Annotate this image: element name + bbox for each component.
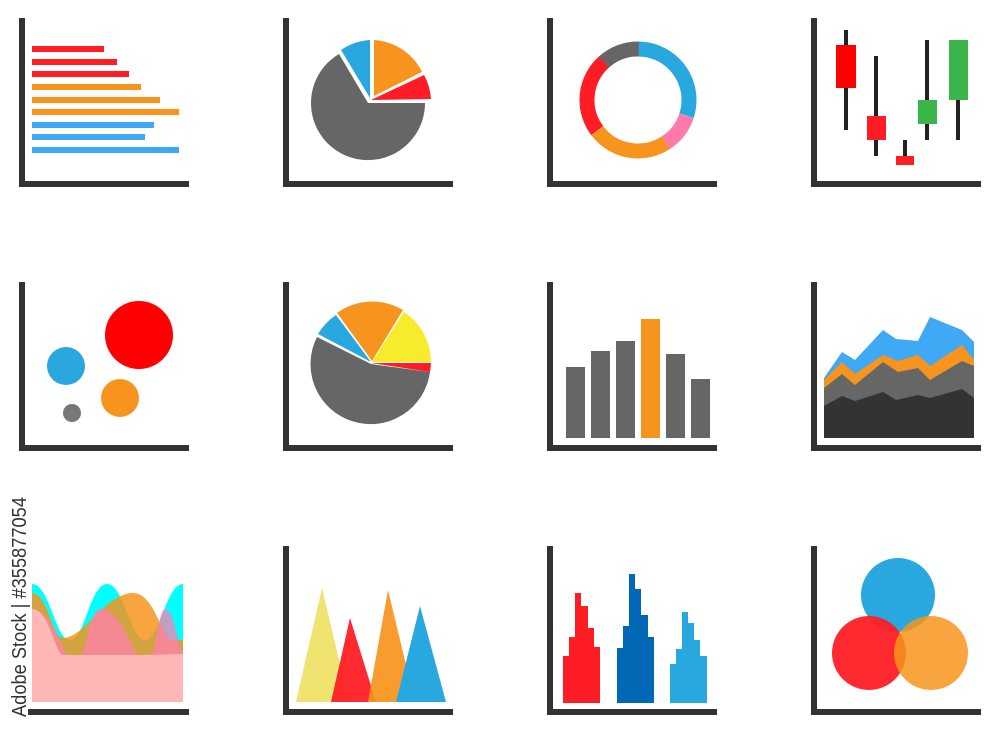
icon: pie chart xyxy=(286,282,453,448)
icon: histogram chart xyxy=(550,546,717,712)
icon: column chart xyxy=(550,282,717,448)
icon: candlestick chart xyxy=(814,18,981,184)
icon: horizontal bar chart xyxy=(22,18,189,184)
icon: wave area chart xyxy=(28,584,189,712)
icon: triangle chart xyxy=(286,546,453,712)
icon: venn diagram xyxy=(814,546,981,712)
icon: stacked area chart xyxy=(814,282,981,448)
icon: donut chart xyxy=(550,18,717,184)
icon: exploded pie chart xyxy=(286,18,453,184)
watermark text: vertical: Adobe Stock | #355877054 xyxy=(9,497,31,717)
icon: bubble chart xyxy=(22,282,189,448)
